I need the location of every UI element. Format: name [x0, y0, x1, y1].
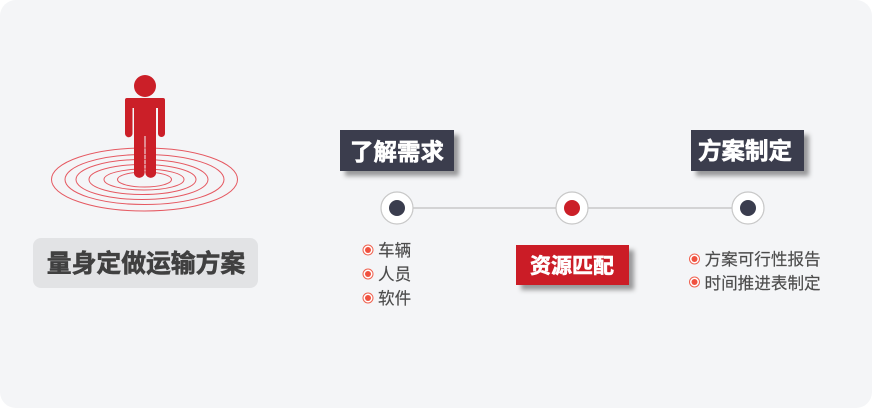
heading: main label [33, 238, 258, 288]
tag: plan formulation [691, 130, 804, 171]
tag: plan formulation: 方案制定 [698, 137, 792, 164]
timeline connector [397, 207, 748, 209]
list: needs items: 人员 [378, 265, 411, 284]
icon: ripple rings [52, 148, 238, 211]
tag: resource matching [516, 245, 629, 285]
list: needs items [363, 241, 411, 308]
list: plan items: 时间推进表制定 [704, 274, 821, 293]
icon: person [125, 75, 165, 178]
node: step 1 [381, 192, 413, 224]
list: plan items: 方案可行性报告 [704, 250, 821, 269]
heading: main label: 量身定做运输方案 [47, 249, 245, 278]
node: step 2 [556, 192, 588, 224]
list: needs items: 车辆 [378, 241, 411, 260]
list: plan items [690, 250, 821, 293]
node: step 3 [732, 192, 764, 224]
tag: resource matching: 资源匹配 [530, 255, 614, 278]
list: needs items: 软件 [378, 289, 411, 308]
tag: understand needs [340, 130, 454, 171]
tag: understand needs: 了解需求 [350, 139, 444, 165]
